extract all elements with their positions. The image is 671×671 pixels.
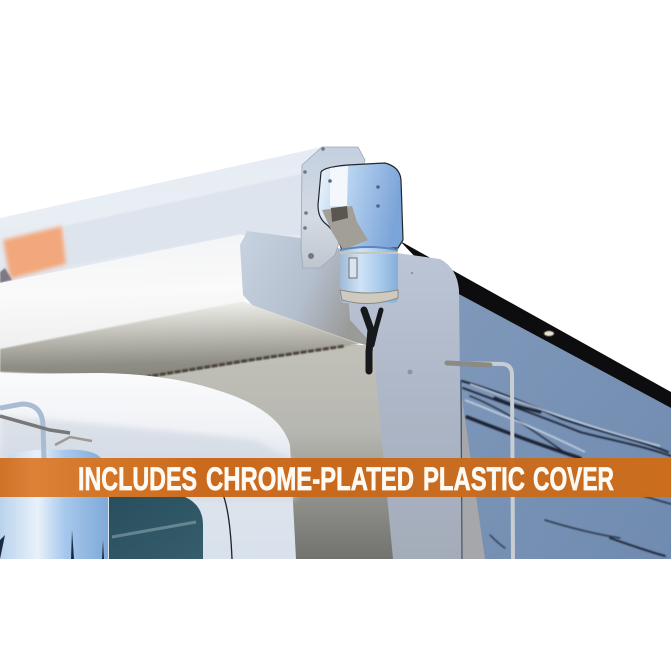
crank rod: [460, 361, 515, 559]
infographic: truck tarp photo with caption band: [0, 146, 671, 559]
bracket screws: [303, 147, 325, 259]
pale panel below cover seam: [66, 174, 302, 244]
weld seam: [145, 346, 345, 377]
steel plate upper: [240, 231, 373, 347]
cab roof and body: [0, 373, 296, 559]
chrome screws: [328, 179, 380, 208]
cab window: [109, 497, 203, 559]
caption text: COVER: [533, 461, 614, 497]
chrome stack: [0, 450, 108, 559]
caption band: [0, 458, 671, 497]
aluminum cover housing: [0, 147, 345, 283]
orange reflection: [3, 226, 66, 279]
plate side flange: [462, 398, 485, 559]
cab door seam: [222, 492, 232, 559]
motor wiring: [364, 310, 381, 371]
black tarp hem: [400, 241, 671, 408]
plate bolts: [408, 272, 413, 374]
tarp wrinkles: [462, 381, 671, 556]
caption text: [78, 461, 614, 497]
caption text: PLASTIC: [423, 461, 525, 497]
caption text: CHROME-PLATED: [206, 461, 414, 497]
tarp fabric: [455, 292, 671, 559]
steel plate main: [345, 248, 462, 559]
grommet: [544, 331, 554, 336]
chrome motor cover: [318, 163, 403, 304]
white beam: [0, 234, 246, 350]
lower chrome canister: [340, 248, 398, 303]
upper chrome housing: [318, 163, 403, 250]
rear grey wall: [156, 345, 393, 559]
beam shaded underside: [0, 301, 360, 378]
light folds: [465, 384, 660, 452]
steel bracket: [301, 147, 365, 268]
grab rail: [0, 404, 44, 460]
photo: dump truck with tarp system: [0, 147, 671, 559]
cab shadow: [0, 416, 296, 500]
caption text: INCLUDES: [78, 461, 197, 497]
